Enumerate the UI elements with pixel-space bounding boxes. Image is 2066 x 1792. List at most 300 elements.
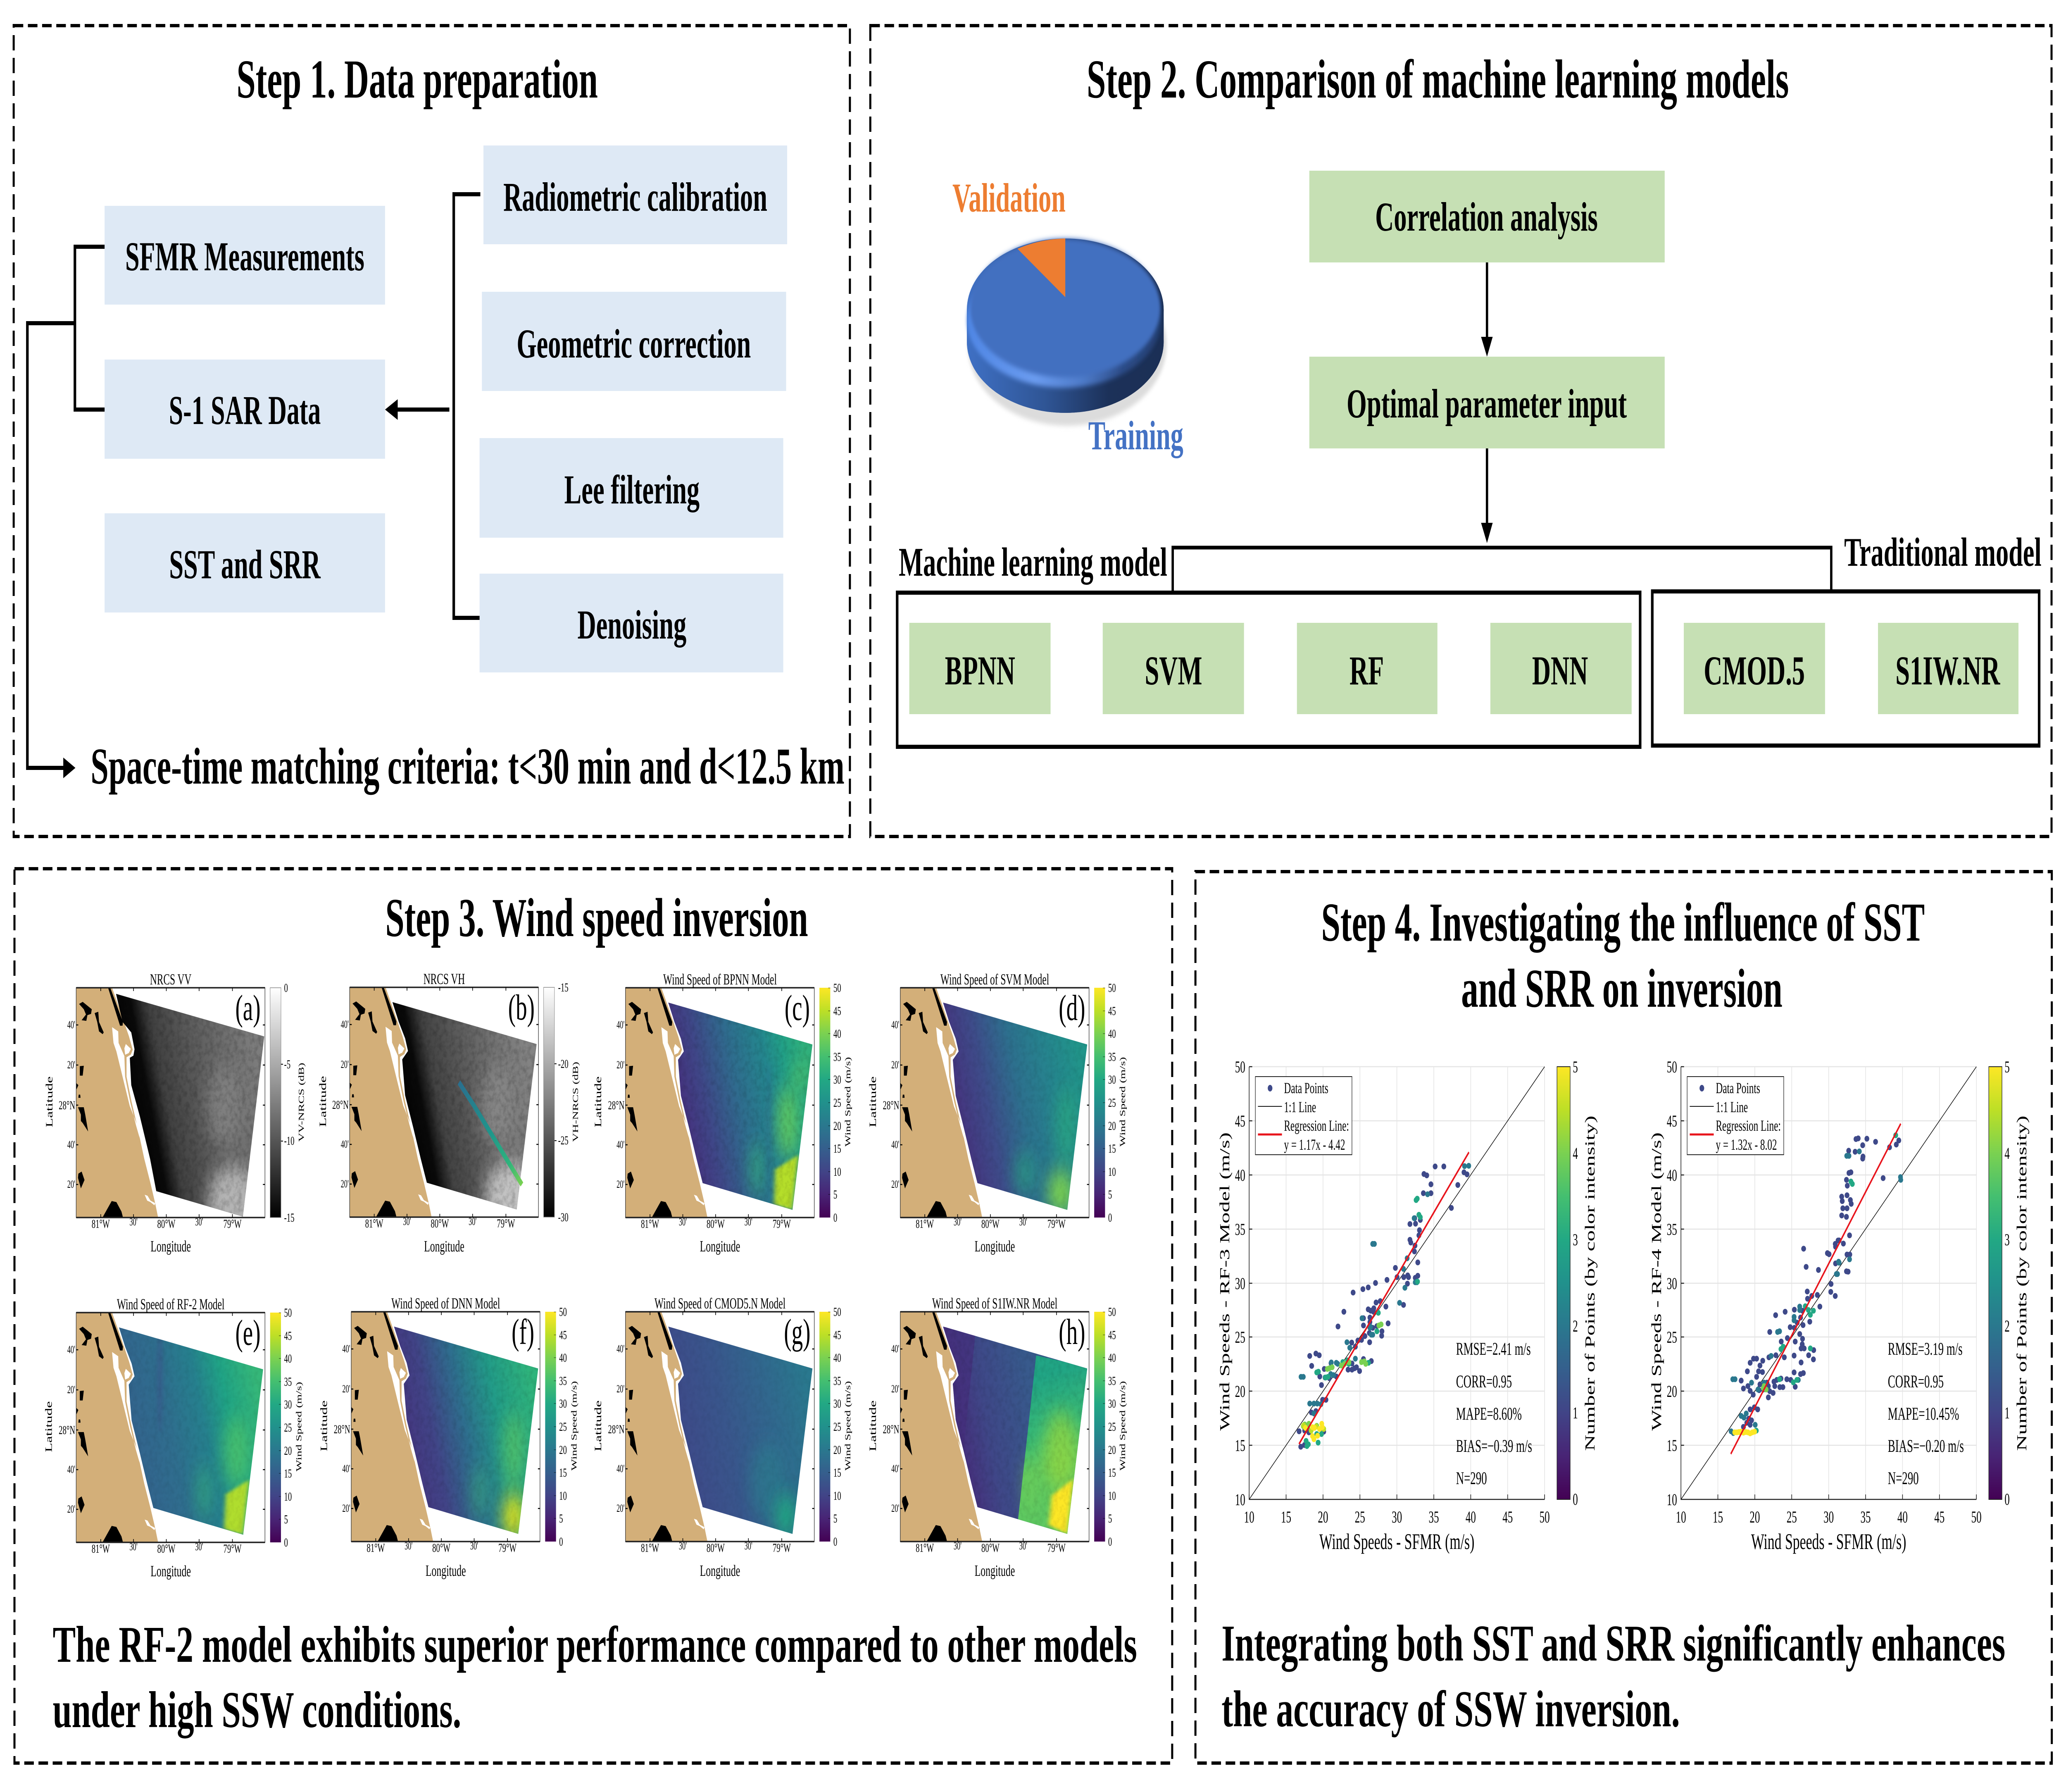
map (g): CMOD5.N wind speed: Wind Speed of CMOD5.N Model bbox=[655, 1294, 785, 1312]
map (h): S1IW.NR wind speed: 40 bbox=[1108, 1351, 1116, 1365]
scatter plot: RF-3 model vs SFMR: 45 bbox=[1235, 1112, 1245, 1131]
map (g): CMOD5.N wind speed: 28°N bbox=[608, 1423, 624, 1436]
conclusion text: step 4 bbox=[1221, 1614, 2005, 1738]
scatter plot: RF-4 model vs SFMR: 30 bbox=[1667, 1275, 1677, 1293]
map (c): BPNN wind speed: Latitude bbox=[593, 1076, 603, 1127]
map (c): BPNN wind speed: 80°W bbox=[707, 1218, 725, 1231]
map (e): RF-2 wind speed bbox=[43, 1295, 303, 1580]
scatter plot: RF-4 model vs SFMR: 15 bbox=[1667, 1437, 1677, 1455]
legend: y = 1.32x - 8.02 bbox=[1716, 1137, 1777, 1153]
map (h): S1IW.NR wind speed: Wind Speed of S1IW.NR Model bbox=[932, 1294, 1057, 1312]
map (c): BPNN wind speed: 30 bbox=[833, 1073, 841, 1087]
map (g): CMOD5.N wind speed: 81°W bbox=[641, 1542, 659, 1555]
scatter plot: RF-4 model vs SFMR: 45 bbox=[1667, 1112, 1677, 1131]
heading: step 4 bbox=[1321, 891, 1925, 1019]
scatter plot: RF-4 model vs SFMR: 30 bbox=[1823, 1508, 1834, 1527]
legend: 1:1 Line bbox=[1284, 1099, 1316, 1115]
map (h): S1IW.NR wind speed: 28°N bbox=[883, 1423, 899, 1436]
map (e): RF-2 wind speed: 20 bbox=[284, 1444, 292, 1458]
map (e): RF-2 wind speed: 0 bbox=[284, 1536, 288, 1549]
panel: step 1 data preparation bbox=[14, 26, 850, 836]
map (e): RF-2 wind speed: 50 bbox=[284, 1306, 292, 1320]
map (f): DNN wind speed: 20 bbox=[559, 1444, 567, 1457]
map (c): BPNN wind speed: 50 bbox=[833, 982, 841, 995]
map (e): RF-2 wind speed: 80°W bbox=[157, 1542, 176, 1556]
box: geometric correction bbox=[482, 292, 786, 391]
box: radiometric calibration: Radiometric calibration bbox=[503, 174, 767, 220]
box: BPNN: BPNN bbox=[945, 648, 1015, 694]
map (d): SVM wind speed: 80°W bbox=[981, 1218, 1000, 1231]
statistics bbox=[1456, 1339, 1532, 1488]
scatter plot: RF-4 model vs SFMR: Wind Speeds - SFMR (m/s) bbox=[1751, 1529, 1906, 1554]
box: denoising: Denoising bbox=[578, 602, 686, 648]
map (h): S1IW.NR wind speed: 35 bbox=[1108, 1375, 1116, 1388]
legend: 1:1 Line bbox=[1716, 1099, 1748, 1115]
map (g): CMOD5.N wind speed: Latitude bbox=[593, 1400, 603, 1451]
scatter plot: RF-3 model vs SFMR: 25 bbox=[1355, 1508, 1365, 1527]
heading: step 3: Step 3. Wind speed inversion bbox=[386, 887, 808, 948]
map (f): DNN wind speed: 15 bbox=[559, 1466, 567, 1480]
map (f): DNN wind speed: 35 bbox=[559, 1375, 567, 1388]
conclusion text: step 4: Integrating both SST and SRR significantly enhances bbox=[1221, 1614, 2005, 1672]
map (a): NRCS VV: 40' bbox=[67, 1019, 75, 1031]
map (f): DNN wind speed: Longitude bbox=[426, 1562, 466, 1579]
map (a): NRCS VV: (a) bbox=[235, 988, 261, 1028]
map (a): NRCS VV: 0 bbox=[284, 982, 288, 995]
map (e): RF-2 wind speed: 20' bbox=[67, 1503, 75, 1515]
map (e): RF-2 wind speed: Wind Speed (m/s) bbox=[295, 1382, 303, 1471]
scatter plot: RF-4 model vs SFMR: 4 bbox=[2004, 1144, 2010, 1163]
map (e): RF-2 wind speed: 5 bbox=[284, 1513, 288, 1526]
map (e): RF-2 wind speed: 40 bbox=[284, 1352, 292, 1365]
map (g): CMOD5.N wind speed: 79°W bbox=[773, 1542, 791, 1555]
map (e): RF-2 wind speed: 15 bbox=[284, 1467, 292, 1480]
map (e): RF-2 wind speed: 10 bbox=[284, 1490, 292, 1504]
map (h): S1IW.NR wind speed: 30 bbox=[1108, 1397, 1116, 1411]
map (d): SVM wind speed: 40' bbox=[891, 1139, 899, 1151]
data points bbox=[1731, 1135, 1901, 1433]
colorbar bbox=[1557, 1067, 1570, 1499]
scatter plot: RF-3 model vs SFMR: 50 bbox=[1540, 1508, 1550, 1527]
map (f): DNN wind speed: 79°W bbox=[498, 1542, 516, 1555]
map (g): CMOD5.N wind speed: 5 bbox=[833, 1512, 837, 1525]
legend: y = 1.17x - 4.42 bbox=[1284, 1137, 1345, 1153]
panel: step 4 influence of SST and SRR bbox=[1195, 872, 2052, 1763]
map (e): RF-2 wind speed: 40' bbox=[67, 1463, 75, 1475]
box: geometric correction: Geometric correction bbox=[516, 321, 751, 367]
arrow: preprocessing to S-1 SAR data bbox=[385, 399, 450, 420]
box: optimal parameter input: Optimal parameter input bbox=[1347, 381, 1627, 427]
map (a): NRCS VV: -10 bbox=[284, 1134, 294, 1148]
box: Lee filtering: Lee filtering bbox=[564, 467, 700, 513]
box: Lee filtering bbox=[480, 438, 783, 538]
conclusion text: step 4: the accuracy of SSW inversion. bbox=[1221, 1680, 1680, 1738]
map (f): DNN wind speed: 28°N bbox=[334, 1423, 350, 1436]
statistics: N=290 bbox=[1888, 1468, 1919, 1488]
scatter plot: RF-4 model vs SFMR: 40 bbox=[1667, 1166, 1677, 1185]
scatter plot: RF-4 model vs SFMR: Number of Points (by color intensity) bbox=[2014, 1115, 2029, 1451]
map (c): BPNN wind speed: 20' bbox=[616, 1178, 624, 1190]
map (h): S1IW.NR wind speed: 30' bbox=[954, 1540, 962, 1552]
scatter plot: RF-4 model vs SFMR: 3 bbox=[2004, 1231, 2010, 1249]
map (d): SVM wind speed: 81°W bbox=[916, 1218, 934, 1231]
map (d): SVM wind speed: 45 bbox=[1108, 1005, 1116, 1018]
scatter plot: RF-4 model vs SFMR: 40 bbox=[1897, 1508, 1908, 1527]
map (a): NRCS VV: 81°W bbox=[92, 1218, 110, 1231]
map (d): SVM wind speed: 79°W bbox=[1047, 1218, 1066, 1231]
legend bbox=[1687, 1077, 1784, 1155]
map (f): DNN wind speed: 10 bbox=[559, 1489, 567, 1503]
map (d): SVM wind speed: 30' bbox=[954, 1216, 962, 1228]
statistics: CORR=0.95 bbox=[1888, 1372, 1944, 1392]
map (h): S1IW.NR wind speed: Latitude bbox=[868, 1400, 878, 1451]
scatter plot: RF-4 model vs SFMR: 50 bbox=[1971, 1508, 1982, 1527]
legend: Data Points bbox=[1716, 1080, 1760, 1096]
map (b): NRCS VH with SFMR track: VH-NRCS (dB) bbox=[571, 1062, 580, 1142]
map (c): BPNN wind speed: 81°W bbox=[641, 1218, 659, 1231]
map (d): SVM wind speed: 40' bbox=[891, 1019, 899, 1031]
map (c): BPNN wind speed: 20' bbox=[616, 1059, 624, 1071]
label: traditional model: Traditional model bbox=[1844, 529, 2042, 575]
map (d): SVM wind speed: Wind Speed of SVM Model bbox=[940, 970, 1049, 988]
map (c): BPNN wind speed: 5 bbox=[833, 1188, 837, 1201]
map (g): CMOD5.N wind speed: 30' bbox=[679, 1540, 687, 1552]
map (g): CMOD5.N wind speed: Wind Speed (m/s) bbox=[844, 1381, 852, 1470]
map (a): NRCS VV: 30' bbox=[195, 1216, 203, 1228]
scatter plot: RF-3 model vs SFMR: 3 bbox=[1573, 1231, 1578, 1249]
map (d): SVM wind speed: Longitude bbox=[975, 1237, 1015, 1255]
map (e): RF-2 wind speed: 20' bbox=[67, 1384, 75, 1396]
statistics: MAPE=8.60% bbox=[1456, 1404, 1522, 1424]
map (d): SVM wind speed: 50 bbox=[1108, 982, 1116, 995]
map (e): RF-2 wind speed: 79°W bbox=[224, 1542, 242, 1556]
map (g): CMOD5.N wind speed: 0 bbox=[833, 1535, 837, 1549]
box: SFMR measurements: SFMR Measurements bbox=[125, 234, 364, 280]
map (d): SVM wind speed: 30' bbox=[1019, 1216, 1027, 1228]
label: training: Training bbox=[1088, 413, 1183, 459]
map (c): BPNN wind speed: 40' bbox=[616, 1139, 624, 1151]
map (h): S1IW.NR wind speed: 30' bbox=[1019, 1540, 1027, 1552]
legend: Regression Line: bbox=[1716, 1118, 1781, 1134]
map (d): SVM wind speed: (d) bbox=[1059, 988, 1085, 1028]
map (e): RF-2 wind speed: 25 bbox=[284, 1421, 292, 1435]
scatter plot: RF-4 model vs SFMR bbox=[1649, 1058, 2029, 1554]
statistics: BIAS=−0.20 m/s bbox=[1888, 1436, 1964, 1456]
map (f): DNN wind speed: 0 bbox=[559, 1535, 563, 1549]
statistics: RMSE=3.19 m/s bbox=[1888, 1339, 1963, 1359]
map (b): NRCS VH with SFMR track: 28°N bbox=[332, 1099, 349, 1112]
map (h): S1IW.NR wind speed: 20 bbox=[1108, 1444, 1116, 1457]
map (d): SVM wind speed: 30 bbox=[1108, 1073, 1116, 1087]
connector: preprocessing bracket bbox=[454, 194, 480, 618]
SFMR flight track bbox=[459, 1082, 522, 1184]
map (c): BPNN wind speed: 20 bbox=[833, 1120, 841, 1133]
map (f): DNN wind speed: 30 bbox=[559, 1397, 567, 1411]
map (a): NRCS VV: -5 bbox=[284, 1058, 290, 1071]
scatter plot: RF-4 model vs SFMR: 1 bbox=[2004, 1404, 2010, 1423]
map (c): BPNN wind speed: 15 bbox=[833, 1142, 841, 1156]
box: CMOD.5: CMOD.5 bbox=[1704, 648, 1805, 694]
map (f): DNN wind speed: 30' bbox=[405, 1540, 412, 1552]
map (f): DNN wind speed: 25 bbox=[559, 1420, 567, 1434]
map (b): NRCS VH with SFMR track: 30' bbox=[403, 1215, 411, 1227]
map (g): CMOD5.N wind speed: 45 bbox=[833, 1329, 841, 1342]
group: machine learning models bbox=[897, 593, 1640, 747]
map (c): BPNN wind speed: 0 bbox=[833, 1211, 837, 1225]
map (b): NRCS VH with SFMR track: -20 bbox=[558, 1058, 569, 1071]
box: S1IW.NR bbox=[1878, 623, 2018, 714]
scatter plot: RF-3 model vs SFMR: 50 bbox=[1235, 1058, 1245, 1077]
scatter plot: RF-4 model vs SFMR: Wind Speeds - RF-4 Model (m/s) bbox=[1649, 1132, 1664, 1431]
scatter plot: RF-4 model vs SFMR: 10 bbox=[1667, 1491, 1677, 1509]
map (a): NRCS VV: 30' bbox=[130, 1216, 138, 1228]
map (b): NRCS VH with SFMR track: 20' bbox=[341, 1058, 349, 1070]
map (c): BPNN wind speed: 30' bbox=[679, 1216, 687, 1228]
map (f): DNN wind speed: 40' bbox=[342, 1463, 350, 1475]
map (c): BPNN wind speed: 30' bbox=[745, 1216, 752, 1228]
scatter plot: RF-3 model vs SFMR: 40 bbox=[1235, 1166, 1245, 1185]
panel: step 2 comparison of machine learning models bbox=[870, 26, 2052, 836]
map (b): NRCS VH with SFMR track: 40' bbox=[341, 1018, 349, 1030]
box: SFMR measurements bbox=[105, 206, 385, 305]
scatter plot: RF-3 model vs SFMR: 35 bbox=[1235, 1220, 1245, 1239]
map (c): BPNN wind speed: 10 bbox=[833, 1165, 841, 1179]
map (f): DNN wind speed: (f) bbox=[512, 1312, 534, 1352]
scatter plot: RF-4 model vs SFMR: 5 bbox=[2004, 1058, 2010, 1077]
map (h): S1IW.NR wind speed bbox=[868, 1294, 1127, 1579]
scatter plot: RF-3 model vs SFMR: 0 bbox=[1573, 1490, 1578, 1509]
statistics: BIAS=−0.39 m/s bbox=[1456, 1436, 1532, 1456]
map (a): NRCS VV: Longitude bbox=[150, 1237, 191, 1255]
map (d): SVM wind speed: 0 bbox=[1108, 1211, 1112, 1225]
map (g): CMOD5.N wind speed: Longitude bbox=[700, 1562, 740, 1579]
heading: step 2: Step 2. Comparison of machine learning models bbox=[1087, 48, 1789, 110]
map (h): S1IW.NR wind speed: 80°W bbox=[981, 1542, 1000, 1555]
scatter plot: RF-4 model vs SFMR: 35 bbox=[1861, 1508, 1871, 1527]
scatter plot: RF-3 model vs SFMR: 10 bbox=[1244, 1508, 1254, 1527]
scatter plot: RF-3 model vs SFMR: 30 bbox=[1235, 1275, 1245, 1293]
map (f): DNN wind speed: 20' bbox=[342, 1383, 350, 1395]
map (f): DNN wind speed: 50 bbox=[559, 1306, 567, 1319]
text: matching criteria: Space-time matching criteria: t<30 min and d<12.5 km bbox=[90, 737, 845, 795]
box: optimal parameter input bbox=[1309, 357, 1665, 448]
scatter plot: RF-4 model vs SFMR: 15 bbox=[1713, 1508, 1723, 1527]
map (d): SVM wind speed: 20' bbox=[891, 1059, 899, 1071]
map (d): SVM wind speed: 25 bbox=[1108, 1096, 1116, 1110]
map (e): RF-2 wind speed: (e) bbox=[235, 1313, 261, 1353]
map (c): BPNN wind speed: (c) bbox=[785, 988, 810, 1028]
map (f): DNN wind speed: 30' bbox=[470, 1540, 478, 1552]
box: RF bbox=[1297, 623, 1438, 714]
map (h): S1IW.NR wind speed: 81°W bbox=[916, 1542, 934, 1555]
map (d): SVM wind speed: 35 bbox=[1108, 1051, 1116, 1064]
scatter plot: RF-4 model vs SFMR: 20 bbox=[1667, 1382, 1677, 1401]
scatter plot: RF-4 model vs SFMR: 20 bbox=[1749, 1508, 1760, 1527]
box: radiometric calibration bbox=[483, 145, 787, 244]
heading: step 4: Step 4. Investigating the influence of SST bbox=[1321, 891, 1925, 953]
statistics: N=290 bbox=[1456, 1468, 1487, 1488]
map (e): RF-2 wind speed: 30' bbox=[195, 1541, 203, 1553]
map (g): CMOD5.N wind speed: 40 bbox=[833, 1351, 841, 1365]
map (c): BPNN wind speed bbox=[593, 970, 852, 1255]
box: DNN: DNN bbox=[1532, 648, 1588, 694]
scatter plot: RF-3 model vs SFMR: Wind Speeds - RF-3 Model (m/s) bbox=[1217, 1132, 1232, 1431]
map (h): S1IW.NR wind speed: 25 bbox=[1108, 1420, 1116, 1434]
map (e): RF-2 wind speed: Longitude bbox=[150, 1562, 191, 1580]
pie chart: training and validation split bbox=[967, 238, 1166, 426]
map (f): DNN wind speed: 80°W bbox=[432, 1542, 450, 1555]
scatter plot: RF-3 model vs SFMR: 4 bbox=[1573, 1144, 1578, 1163]
scatter plot: RF-4 model vs SFMR: 50 bbox=[1667, 1058, 1677, 1077]
box: S-1 SAR data bbox=[105, 360, 385, 459]
map (c): BPNN wind speed: 28°N bbox=[608, 1099, 624, 1112]
map (b): NRCS VH with SFMR track: -25 bbox=[558, 1134, 569, 1147]
map (a): NRCS VV: 20' bbox=[67, 1178, 75, 1190]
map (e): RF-2 wind speed: 30 bbox=[284, 1398, 292, 1411]
scatter plot: RF-4 model vs SFMR: 45 bbox=[1934, 1508, 1945, 1527]
heading: step 4: and SRR on inversion bbox=[1461, 958, 1783, 1019]
map (d): SVM wind speed: Latitude bbox=[868, 1076, 878, 1127]
map (h): S1IW.NR wind speed: 20' bbox=[891, 1383, 899, 1395]
map (e): RF-2 wind speed: 81°W bbox=[92, 1542, 110, 1556]
legend bbox=[1255, 1077, 1352, 1155]
map (g): CMOD5.N wind speed: 10 bbox=[833, 1489, 841, 1503]
map (g): CMOD5.N wind speed: 15 bbox=[833, 1466, 841, 1480]
map (b): NRCS VH with SFMR track: 20' bbox=[341, 1178, 349, 1190]
map (h): S1IW.NR wind speed: 5 bbox=[1108, 1512, 1112, 1525]
map (b): NRCS VH with SFMR track: 79°W bbox=[497, 1217, 515, 1230]
map (c): BPNN wind speed: Wind Speed (m/s) bbox=[844, 1057, 852, 1146]
map (h): S1IW.NR wind speed: 40' bbox=[891, 1343, 899, 1355]
map (c): BPNN wind speed: Longitude bbox=[700, 1237, 740, 1255]
box: denoising bbox=[480, 574, 783, 672]
map (a): NRCS VV: NRCS VV bbox=[150, 970, 192, 988]
map (b): NRCS VH with SFMR track: -30 bbox=[558, 1211, 569, 1224]
scatter plot: RF-3 model vs SFMR: 35 bbox=[1429, 1508, 1439, 1527]
map (e): RF-2 wind speed: Latitude bbox=[43, 1401, 54, 1452]
map (f): DNN wind speed: 5 bbox=[559, 1512, 563, 1525]
map (d): SVM wind speed: 20 bbox=[1108, 1120, 1116, 1133]
map (e): RF-2 wind speed: 28°N bbox=[59, 1424, 75, 1437]
map (b): NRCS VH with SFMR track bbox=[318, 970, 580, 1255]
map (c): BPNN wind speed: 79°W bbox=[773, 1218, 791, 1231]
scatter plot: RF-4 model vs SFMR: 25 bbox=[1667, 1328, 1677, 1347]
map (f): DNN wind speed: Wind Speed of DNN Model bbox=[391, 1294, 500, 1312]
scatter plot: RF-4 model vs SFMR: 10 bbox=[1676, 1508, 1686, 1527]
map (b): NRCS VH with SFMR track: 40' bbox=[341, 1138, 349, 1150]
data points bbox=[1299, 1166, 1469, 1447]
map (d): SVM wind speed: 5 bbox=[1108, 1188, 1112, 1201]
statistics: RMSE=2.41 m/s bbox=[1456, 1339, 1531, 1359]
map (h): S1IW.NR wind speed: 10 bbox=[1108, 1489, 1116, 1503]
box: SST and SRR bbox=[105, 513, 385, 612]
map (f): DNN wind speed: 81°W bbox=[367, 1542, 385, 1555]
map (g): CMOD5.N wind speed: 20 bbox=[833, 1444, 841, 1457]
map (a): NRCS VV: VV-NRCS (dB) bbox=[298, 1063, 306, 1142]
connector: left data bracket bbox=[27, 247, 105, 768]
map (b): NRCS VH with SFMR track: NRCS VH bbox=[424, 970, 465, 987]
box: BPNN bbox=[909, 623, 1050, 714]
scatter plot: RF-3 model vs SFMR: 5 bbox=[1573, 1058, 1578, 1077]
legend: Regression Line: bbox=[1284, 1118, 1349, 1134]
map (g): CMOD5.N wind speed: 35 bbox=[833, 1375, 841, 1388]
map (d): SVM wind speed: 28°N bbox=[883, 1099, 899, 1112]
map (g): CMOD5.N wind speed: 40' bbox=[616, 1343, 624, 1355]
map (a): NRCS VV: Latitude bbox=[44, 1076, 55, 1127]
scatter plot: RF-4 model vs SFMR: 0 bbox=[2004, 1490, 2010, 1509]
map (g): CMOD5.N wind speed: 30' bbox=[745, 1540, 752, 1552]
box: SST and SRR: SST and SRR bbox=[169, 542, 321, 588]
group: traditional models bbox=[1652, 591, 2039, 746]
scatter plot: RF-3 model vs SFMR: 30 bbox=[1392, 1508, 1402, 1527]
map (h): S1IW.NR wind speed: 20' bbox=[891, 1502, 899, 1514]
map (a): NRCS VV: 20' bbox=[67, 1059, 75, 1071]
heading: step 1: Step 1. Data preparation bbox=[237, 48, 598, 110]
map (b): NRCS VH with SFMR track: 80°W bbox=[431, 1217, 449, 1230]
map (g): CMOD5.N wind speed: 20' bbox=[616, 1383, 624, 1395]
map (g): CMOD5.N wind speed: 50 bbox=[833, 1306, 841, 1319]
map (c): BPNN wind speed: 40' bbox=[616, 1019, 624, 1031]
map (d): SVM wind speed bbox=[868, 970, 1127, 1255]
map (b): NRCS VH with SFMR track: 81°W bbox=[365, 1217, 383, 1230]
map (a): NRCS VV: -15 bbox=[284, 1211, 294, 1225]
box: DNN bbox=[1490, 623, 1632, 714]
map (a): NRCS VV: 40' bbox=[67, 1139, 75, 1151]
map (d): SVM wind speed: 10 bbox=[1108, 1165, 1116, 1179]
scatter plot: RF-3 model vs SFMR: 45 bbox=[1502, 1508, 1513, 1527]
box: S-1 SAR data: S-1 SAR Data bbox=[169, 388, 321, 434]
box: CMOD.5 bbox=[1684, 623, 1825, 714]
map (f): DNN wind speed: 45 bbox=[559, 1329, 567, 1342]
label: validation: Validation bbox=[952, 175, 1066, 221]
map (d): SVM wind speed: 20' bbox=[891, 1178, 899, 1190]
map (d): SVM wind speed: 40 bbox=[1108, 1027, 1116, 1041]
box: SVM: SVM bbox=[1145, 648, 1202, 694]
map (a): NRCS VV: 79°W bbox=[224, 1218, 242, 1231]
map (b): NRCS VH with SFMR track: 30' bbox=[469, 1215, 476, 1227]
map (h): S1IW.NR wind speed: 40' bbox=[891, 1463, 899, 1475]
conclusion text: step 3: The RF-2 model exhibits superior performance compared to other models bbox=[53, 1616, 1137, 1673]
map (g): CMOD5.N wind speed: (g) bbox=[784, 1312, 810, 1352]
conclusion text: step 3: under high SSW conditions. bbox=[53, 1681, 461, 1739]
scatter plot: RF-3 model vs SFMR: 20 bbox=[1235, 1382, 1245, 1401]
arrow: correlation to optimal input bbox=[1481, 262, 1492, 357]
map (e): RF-2 wind speed: 40' bbox=[67, 1344, 75, 1356]
map (e): RF-2 wind speed: 30' bbox=[130, 1541, 138, 1553]
scatter plot: RF-3 model vs SFMR: Wind Speeds - SFMR (m/s) bbox=[1319, 1529, 1474, 1554]
scatter plot: RF-4 model vs SFMR: 25 bbox=[1787, 1508, 1797, 1527]
map (f): DNN wind speed: Latitude bbox=[319, 1400, 329, 1451]
scatter plot: RF-3 model vs SFMR bbox=[1217, 1058, 1597, 1554]
map (a): NRCS VV bbox=[44, 970, 306, 1255]
map (d): SVM wind speed: 15 bbox=[1108, 1142, 1116, 1156]
map (a): NRCS VV: 80°W bbox=[157, 1218, 176, 1231]
statistics: MAPE=10.45% bbox=[1888, 1404, 1959, 1424]
connector: model bracket bbox=[1173, 548, 1831, 592]
arrow: optimal input to models bbox=[1481, 448, 1492, 543]
scatter plot: RF-4 model vs SFMR: 2 bbox=[2004, 1317, 2010, 1336]
map (h): S1IW.NR wind speed: 79°W bbox=[1047, 1542, 1066, 1555]
conclusion text: step 3 bbox=[53, 1616, 1137, 1739]
map (b): NRCS VH with SFMR track: (b) bbox=[508, 987, 535, 1027]
panel: step 3 wind speed inversion bbox=[14, 869, 1172, 1763]
map (g): CMOD5.N wind speed: 30 bbox=[833, 1397, 841, 1411]
scatter plot: RF-3 model vs SFMR: 20 bbox=[1318, 1508, 1328, 1527]
map (f): DNN wind speed bbox=[319, 1294, 578, 1579]
regression line bbox=[1731, 1124, 1901, 1454]
arrow: to matching criteria bbox=[63, 758, 75, 778]
box: SVM bbox=[1103, 623, 1244, 714]
